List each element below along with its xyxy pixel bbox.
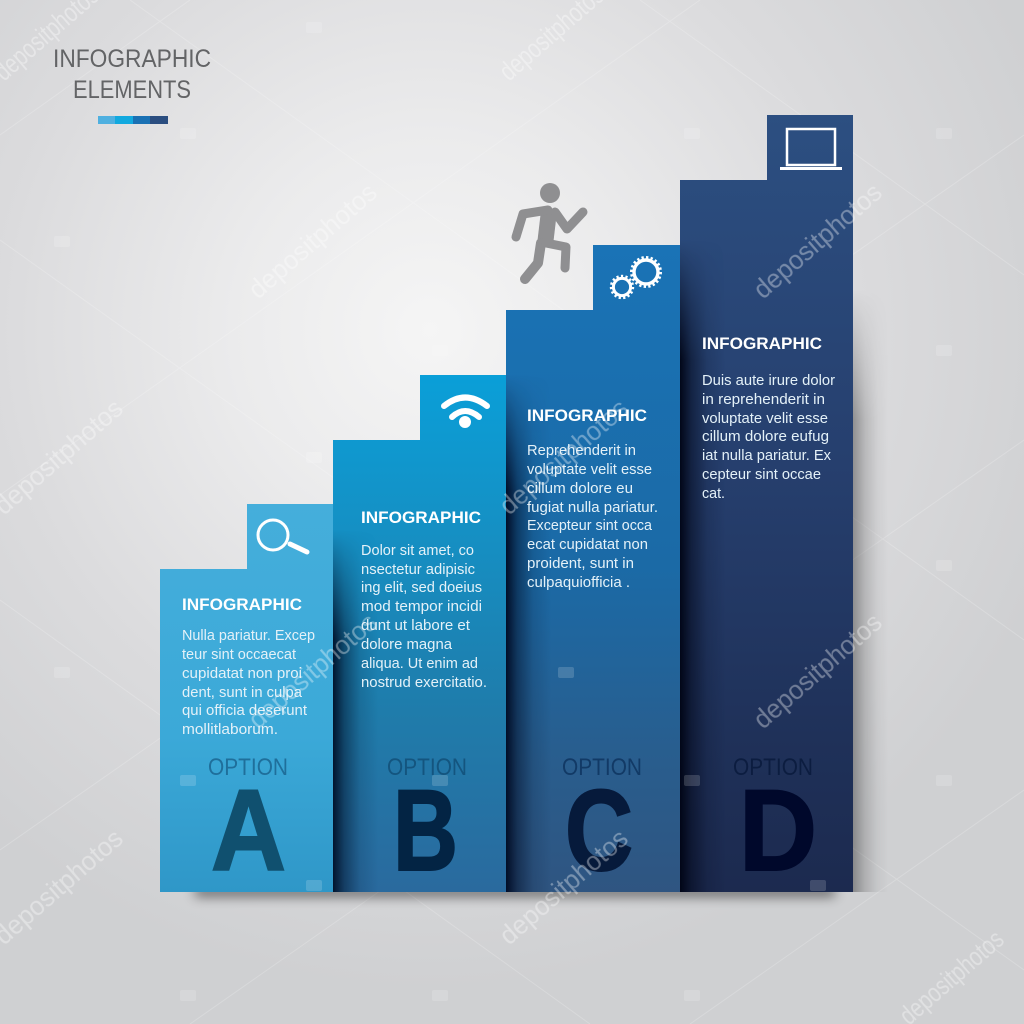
body text D: in reprehenderit in <box>702 392 825 408</box>
icon: wifi <box>444 398 487 428</box>
body text D: iat nulla pariatur. Ex <box>702 448 832 464</box>
body text D: voluptate velit esse <box>702 411 828 427</box>
step shape B <box>333 375 506 892</box>
body text A: cupidatat non proi <box>182 666 302 682</box>
option label D: OPTION <box>733 754 813 781</box>
panel: column B <box>333 375 506 895</box>
watermarks: depositphotos <box>242 607 383 735</box>
page title: ELEMENTS <box>73 76 191 104</box>
body text B: aliqua. Ut enim ad <box>361 656 478 672</box>
body text B: nostrud exercitatio. <box>361 675 487 691</box>
body text A: Nulla pariatur. Excep <box>182 628 315 644</box>
body text D: Duis aute irure dolor <box>702 373 835 389</box>
watermarks: depositphotos <box>493 823 634 951</box>
body text B: dunt ut labore et <box>361 618 470 634</box>
letter C: C <box>565 767 633 895</box>
shadow on column C <box>506 382 543 892</box>
body text B: ing elit, sed doeius <box>361 580 482 596</box>
body text B: dolore magna <box>361 637 453 653</box>
body text B: nsectetur adipisic <box>361 562 475 578</box>
shadow on column D <box>680 250 715 892</box>
shadow on column B <box>333 536 370 892</box>
panel: column C <box>506 245 680 895</box>
heading D: INFOGRAPHIC <box>702 334 822 353</box>
icon: laptop <box>780 129 842 170</box>
watermarks: depositphotos <box>493 393 634 521</box>
letter B: B <box>393 767 458 895</box>
icon: magnifier <box>258 520 307 552</box>
title colour bar <box>98 116 168 124</box>
icon: gears <box>611 258 660 298</box>
body text D <box>702 373 835 502</box>
body text C: voluptate velit esse <box>527 462 652 478</box>
page title <box>53 45 211 104</box>
body text C: ecat cupidatat non <box>527 537 648 553</box>
body text A <box>182 628 315 738</box>
step shape A <box>160 504 333 892</box>
step shape C <box>506 245 680 892</box>
body text D: cillum dolore eufug <box>702 429 829 445</box>
icon: running figure <box>516 183 583 279</box>
heading A: INFOGRAPHIC <box>182 595 302 614</box>
body text C: fugiat nulla pariatur. <box>527 500 658 516</box>
watermarks: depositphotos <box>242 177 383 305</box>
body text C: Excepteur sint occa <box>527 518 653 534</box>
body text C <box>527 443 658 591</box>
heading C: INFOGRAPHIC <box>527 406 647 425</box>
watermarks: depositphotos <box>747 607 888 735</box>
body text C: Reprehenderit in <box>527 443 636 459</box>
option label C: OPTION <box>562 754 642 781</box>
drop shadows behind stairs <box>195 290 888 896</box>
step shape D <box>680 115 853 892</box>
body text A: mollitlaborum. <box>182 722 278 738</box>
letter D: D <box>739 767 817 895</box>
option label B: OPTION <box>387 754 467 781</box>
letter A: A <box>211 767 286 895</box>
body text D: cepteur sint occae <box>702 467 821 483</box>
panel: column A <box>160 504 333 895</box>
panel: column D <box>680 115 853 895</box>
body text B <box>361 543 487 691</box>
body text A: teur sint occaecat <box>182 647 296 663</box>
heading B: INFOGRAPHIC <box>361 508 481 527</box>
body text B: Dolor sit amet, co <box>361 543 474 559</box>
body text C: cillum dolore eu <box>527 481 633 497</box>
body text B: mod tempor incidi <box>361 599 482 615</box>
option label A: OPTION <box>208 754 288 781</box>
body text A: qui officia deserunt <box>182 703 307 719</box>
watermarks: depositphotos <box>747 177 888 305</box>
body text C: proident, sunt in <box>527 556 634 572</box>
page title: INFOGRAPHIC <box>53 45 211 73</box>
body text A: dent, sunt in culpa <box>182 685 303 701</box>
body text C: culpaquiofficia . <box>527 575 630 591</box>
body text D: cat. <box>702 486 725 502</box>
